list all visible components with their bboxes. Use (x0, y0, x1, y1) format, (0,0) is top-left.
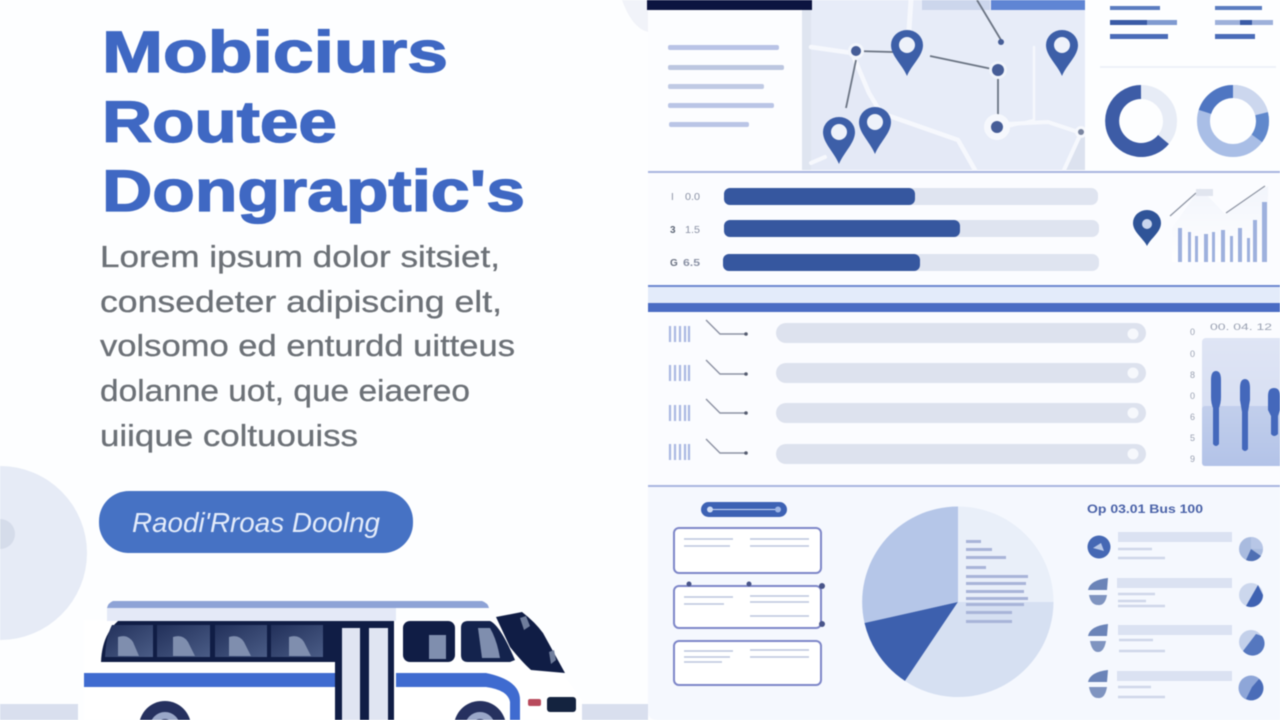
axis labels: 0 (1190, 327, 1195, 337)
columns (1211, 371, 1280, 451)
bar labels: 3 (670, 225, 676, 236)
axis labels (1190, 322, 1272, 464)
title (102, 20, 525, 224)
list row 1 (1088, 532, 1263, 561)
roof shade (107, 608, 396, 621)
title: Mobiciurs (102, 20, 448, 85)
card 3 (674, 641, 821, 685)
button (99, 491, 413, 553)
panel: text list card (648, 10, 802, 170)
front windows (403, 621, 515, 662)
trend bars (1178, 202, 1267, 262)
row 4 (670, 439, 1146, 464)
body paragraph: consedeter adipiscing elt, (100, 284, 502, 319)
donut chart: segmented (1204, 92, 1262, 150)
headlight (547, 697, 576, 712)
row 2 (670, 360, 1146, 383)
header band (648, 285, 1280, 312)
card 2 (674, 582, 825, 628)
bus roof (107, 601, 489, 608)
pie legend lines (966, 540, 1028, 623)
card 1 (674, 528, 821, 573)
title: Routee (102, 90, 337, 155)
list heading: Op 03.01 Bus 100 (1087, 502, 1203, 516)
bar labels: 6.5 (683, 258, 701, 269)
trend mini chart (1133, 186, 1268, 262)
button: Raodi'Rroas Doolng (132, 507, 380, 538)
list row 3 (1088, 624, 1265, 656)
bar labels: G (670, 258, 678, 269)
axis labels: 6 (1190, 412, 1195, 422)
title: Dongraptic's (102, 159, 525, 224)
ground strips (0, 0, 648, 720)
column chart (1190, 322, 1280, 466)
map pins (823, 30, 1078, 164)
bar labels: I (671, 192, 674, 203)
axis labels: 0 (1190, 349, 1195, 359)
panel: mini bars and donuts (1085, 0, 1280, 170)
top dark bar (647, 0, 812, 10)
passenger window band (101, 621, 394, 662)
body paragraph: volsomo ed enturdd uitteus (100, 328, 515, 363)
body paragraph: dolanne uot, que eiaereo (100, 373, 470, 408)
bar labels: 0.0 (685, 192, 700, 203)
mini bars (1110, 6, 1273, 39)
windshield (496, 612, 565, 673)
list row 4 (1088, 670, 1264, 700)
door (335, 621, 394, 720)
front wheel and rear wheel (139, 701, 506, 720)
row 1 (670, 320, 1146, 343)
list row 2 (1088, 578, 1263, 607)
panel: bottom section (648, 487, 1280, 720)
route rows (670, 320, 1146, 464)
decorative circle left (0, 466, 87, 640)
axis labels: 9 (1190, 454, 1195, 464)
map roads (811, 0, 1081, 170)
pill header (701, 502, 787, 517)
axis labels: 8 (1190, 370, 1195, 380)
bar labels: 1.5 (685, 225, 700, 236)
panel: route map (802, 0, 1087, 170)
location pin (1133, 210, 1161, 246)
body paragraph (100, 239, 515, 453)
bus body (84, 620, 582, 720)
axis labels: 00. 04. 12 (1210, 322, 1272, 332)
body paragraph: uiique coltuouiss (100, 418, 358, 453)
blue stripe (84, 673, 520, 720)
illustration: bus (84, 601, 582, 720)
dashboard panel (647, 0, 1280, 720)
route lines (846, 0, 1001, 120)
tail light (528, 699, 541, 706)
donut chart: dark (1112, 92, 1170, 150)
bar labels (670, 192, 701, 269)
body paragraph: Lorem ipsum dolor sitsiet, (100, 239, 500, 274)
axis labels: 0 (1190, 391, 1195, 401)
axis labels: 5 (1190, 433, 1195, 443)
pie chart (862, 506, 1054, 697)
trend line (1170, 186, 1265, 216)
progress bars (670, 188, 1099, 271)
route nodes (848, 39, 1087, 140)
row 3 (670, 399, 1146, 423)
